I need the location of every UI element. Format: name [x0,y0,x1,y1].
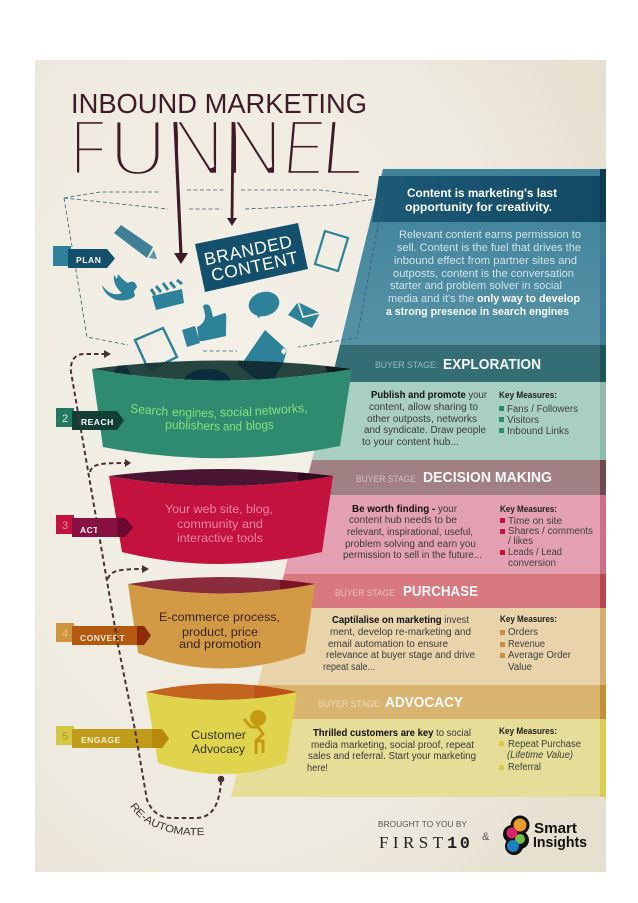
re-automate dashed path [71,354,221,818]
text: advocacy body: sales and referral. Start your marketing [308,751,476,762]
heading: advocacy: BUYER STAGE: [318,699,382,710]
text: decision body: Be worth finding - your [352,504,458,515]
text: purchase body [323,615,475,673]
key measures: decision: Leads / Lead [508,547,562,558]
icon: twitter bird [102,274,137,300]
text: decision body: problem solving and earn you [345,539,476,550]
funnel: reach: blogs [245,418,274,433]
icon: photo frame [135,328,177,371]
tag: engage: 5 [62,731,68,743]
funnel: convert: E-commerce process, [159,610,280,624]
key measures: advocacy [499,726,581,773]
key measures: purchase: Key Measures: [500,614,557,625]
branded content sign [195,223,308,292]
panel: right column backgrounds [231,169,606,797]
key measures: advocacy: Repeat Purchase [508,739,581,750]
funnel: reach: engines, [172,405,217,421]
title: funnel: L [318,102,370,192]
tag: reach [56,408,124,430]
icon: thumbs up [182,304,226,347]
funnel: act: community and [177,517,263,531]
logo: smart insights: Insights [533,834,587,851]
title: funnel: U [109,103,167,192]
key measures: decision: Shares / comments [508,526,593,537]
tag: act: 3 [62,520,68,532]
title: funnel: N [167,103,225,192]
key measures: purchase: Orders [508,627,538,638]
text: purchase body: repeat sale... [323,662,375,673]
text: exploration body: Publish and promote your [371,390,488,401]
text: exploration body [362,390,488,448]
text: content body [386,229,581,318]
key measures: decision: Time on site [508,516,562,527]
tag: plan [53,246,115,268]
funnel: reach: Search [130,402,169,419]
funnel: reach [92,357,352,458]
tag: convert [56,623,151,645]
text: content body: inbound effect from partner sites and [394,255,577,267]
text: content headline: Content is marketing's last [407,188,557,200]
funnel: convert: and promotion [179,637,261,651]
title: funnel: E [280,103,329,193]
key measures: decision: / likes [508,536,533,547]
icon: customer figure [244,710,266,754]
tag: convert: 4 [62,628,68,640]
plan funnel dashed outline [64,190,383,351]
footer: brought to you by first 10 [378,819,470,854]
title: funnel [70,102,370,264]
icon: clapperboard [151,280,184,310]
text: decision body: relevant, inspirational, useful, [347,527,473,538]
icon: notebook [243,330,287,364]
tag: engage: ENGAGE [81,735,121,745]
logo: smart insights [503,816,587,855]
text: purchase body: Captilalise on marketing invest [332,615,469,626]
text: exploration body: other outposts, networks [367,414,477,425]
text: advocacy body: Thrilled customers are key to social [313,728,471,739]
funnel: engage: Advocacy [192,742,246,756]
text: advocacy body [307,728,476,774]
label: re-automate: RE-AUTOMATE [130,802,204,836]
tag: engage [56,726,169,748]
heading: purchase [335,583,478,600]
heading: decision making: DECISION MAKING [423,469,552,486]
text: purchase body: email automation to ensure [328,639,448,650]
key measures: exploration: Inbound Links [507,426,569,437]
icon: tablet [315,231,348,271]
text: advocacy body: media marketing, social proof, repeat [311,740,474,751]
branded content sign: BRANDED [202,231,294,269]
text: content body: a strong presence in search engines [386,306,569,318]
text: content headline: opportunity for creativity. [405,202,552,214]
text: decision body: permission to sell in the future... [343,550,482,561]
icon: speech bubble [246,288,282,320]
key measures: advocacy: Referral [508,762,541,773]
funnel: act: Your web site, blog, [165,502,273,516]
dashed path arrowheads [104,350,224,782]
key measures: purchase: Average Order [508,650,572,661]
footer: brought to you by first 10: 10 [447,835,470,854]
heading: purchase: BUYER STAGE [335,588,395,599]
heading: decision making [356,469,552,486]
key measures: exploration: Visitors [507,415,539,426]
funnel: engage [146,684,297,774]
text: purchase body: relevance at buyer stage and drive [326,650,475,661]
text: content headline [405,188,557,214]
footer: brought to you by first 10: FIRST [379,833,444,852]
key measures: decision: conversion [508,558,556,569]
text: content body: only way to develop [477,293,580,305]
funnel: convert: product, price [182,625,258,639]
funnel: act: interactive tools [177,531,263,545]
tag: act: ACT [80,525,99,535]
text: exploration body: to your content hub... [362,437,459,448]
funnel: engage: Customer [191,728,246,742]
heading: advocacy: ADVOCACY [385,694,463,711]
heading: advocacy [318,694,463,711]
key measures: decision [500,504,593,569]
logo: smart insights: Smart [534,820,577,837]
text: content body: sell. Content is the fuel that drives the [397,242,581,254]
tag: act [56,515,133,537]
tag: reach: REACH [81,417,114,427]
tag: convert: CONVERT [80,633,125,643]
text: decision body: content hub needs to be [349,515,457,526]
tag: reach: 2 [62,413,68,425]
text: exploration body: content, allow sharing to [369,402,478,413]
text: content body: Relevant content earns permission to [399,229,581,241]
branded content sign: CONTENT [209,247,300,285]
text: content body: outposts, content is the conversation [393,268,574,280]
icon: pencil [114,225,157,259]
title: funnel: N [225,103,283,192]
tag: plan: PLAN [76,255,102,265]
title: inbound marketing: INBOUND MARKETING [71,88,367,119]
key measures: decision: Key Measures: [500,504,557,515]
text: content body: media and it's the [388,293,474,305]
heading: exploration [375,356,541,373]
text: purchase body: ment, develop re-marketing and [330,627,471,638]
key measures: exploration [499,390,578,437]
text: content body: starter and problem solver in social [390,280,562,292]
icon: envelope [288,302,320,328]
key measures: purchase [500,614,572,673]
key measures: advocacy: (Lifetime Value) [507,750,573,761]
funnel: reach: social [220,405,252,419]
key measures: purchase: Revenue [508,639,545,650]
heading: exploration: EXPLORATION [443,356,541,373]
text: exploration body: and syndicate. Draw people [364,425,486,436]
heading: decision making: BUYER STAGE [356,474,416,485]
footer: brought to you by first 10: BROUGHT TO YOU BY [378,819,467,829]
funnel: reach: and [223,420,242,434]
funnel: reach: publishers [165,418,220,433]
key measures: purchase: Value [508,662,532,673]
text: advocacy body: here! [307,763,328,774]
heading: exploration: BUYER STAGE: [375,360,438,371]
text: decision body [343,504,482,561]
heading: purchase: PURCHASE [403,583,478,600]
funnel: act [109,469,333,564]
title: funnel: F [70,102,107,192]
ampersand: & [482,831,490,843]
key measures: exploration: Key Measures: [499,390,557,401]
key measures: exploration: Fans / Followers [507,404,578,415]
funnel: reach: networks, [254,401,308,418]
funnel: convert [128,570,320,668]
key measures: advocacy: Key Measures: [499,726,557,737]
